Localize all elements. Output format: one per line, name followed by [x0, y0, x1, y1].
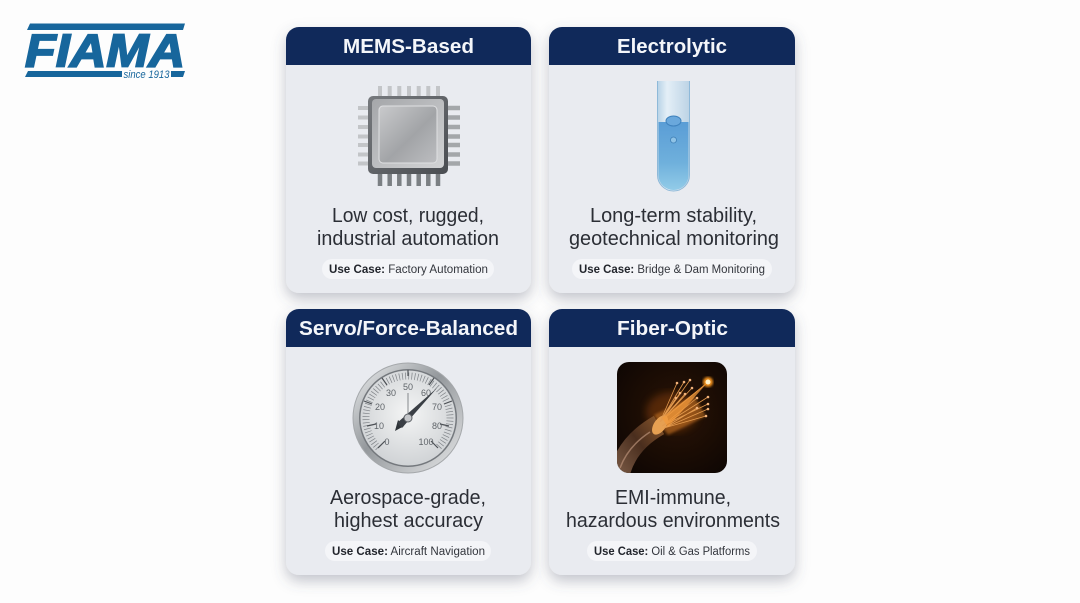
icon: test tube [658, 81, 690, 191]
heading: Fiber-Optic: Fiber-Optic [617, 318, 728, 340]
description [317, 205, 499, 250]
gauge numbers: 60 [421, 388, 431, 398]
heading: Electrolytic: Electrolytic [617, 36, 727, 58]
description [330, 487, 486, 532]
logo: FIAMA since 1913: since 1913 [124, 69, 170, 81]
gauge numbers: 10 [374, 421, 384, 431]
gauge needles [395, 388, 437, 431]
description: hazardous environments [566, 510, 780, 532]
panel: MEMS-Based [286, 27, 531, 293]
heading: Servo/Force-Balanced [286, 309, 531, 347]
use case pill [325, 541, 491, 561]
use case pill: Use Case: Aircraft Navigation [332, 546, 485, 558]
use case pill: Use Case: Factory Automation [329, 264, 488, 276]
gauge numbers: 100 [418, 437, 434, 447]
gauge numbers: 70 [432, 402, 442, 412]
icon: fiber optic cable [617, 362, 727, 480]
description: Long-term stability, [590, 205, 757, 227]
heading: MEMS-Based: MEMS-Based [343, 36, 474, 58]
description: Aerospace-grade, [330, 487, 486, 509]
use case pill [322, 259, 494, 279]
gauge numbers: 20 [375, 402, 385, 412]
heading: MEMS-Based [286, 27, 531, 65]
description: industrial automation [317, 228, 499, 250]
icon: analog gauge [353, 363, 463, 473]
heading: Electrolytic [549, 27, 795, 65]
gauge numbers: 30 [386, 388, 396, 398]
description: highest accuracy [334, 510, 483, 532]
logo: FIAMA since 1913: FIAMA [25, 24, 185, 76]
use case pill: Use Case: Bridge & Dam Monitoring [579, 264, 765, 276]
description [569, 205, 779, 250]
description [566, 487, 780, 532]
panel: Electrolytic [549, 27, 795, 293]
gauge numbers: 80 [432, 421, 442, 431]
panel: Servo/Force-Balanced [286, 309, 531, 575]
gauge numbers: 50 [403, 382, 413, 392]
heading: Servo/Force-Balanced: Servo/Force-Balanced [299, 318, 518, 340]
description: geotechnical monitoring [569, 228, 779, 250]
description: Low cost, rugged, [332, 205, 484, 227]
use case pill: Use Case: Oil & Gas Platforms [594, 546, 750, 558]
gauge numbers [374, 382, 442, 447]
description: EMI-immune, [615, 487, 731, 509]
icon: microchip [358, 86, 460, 186]
heading: Fiber-Optic [549, 309, 795, 347]
gauge numbers: 0 [384, 437, 390, 447]
use case pill [572, 259, 772, 279]
panel: Fiber-Optic [549, 309, 795, 575]
use case pill [587, 541, 757, 561]
